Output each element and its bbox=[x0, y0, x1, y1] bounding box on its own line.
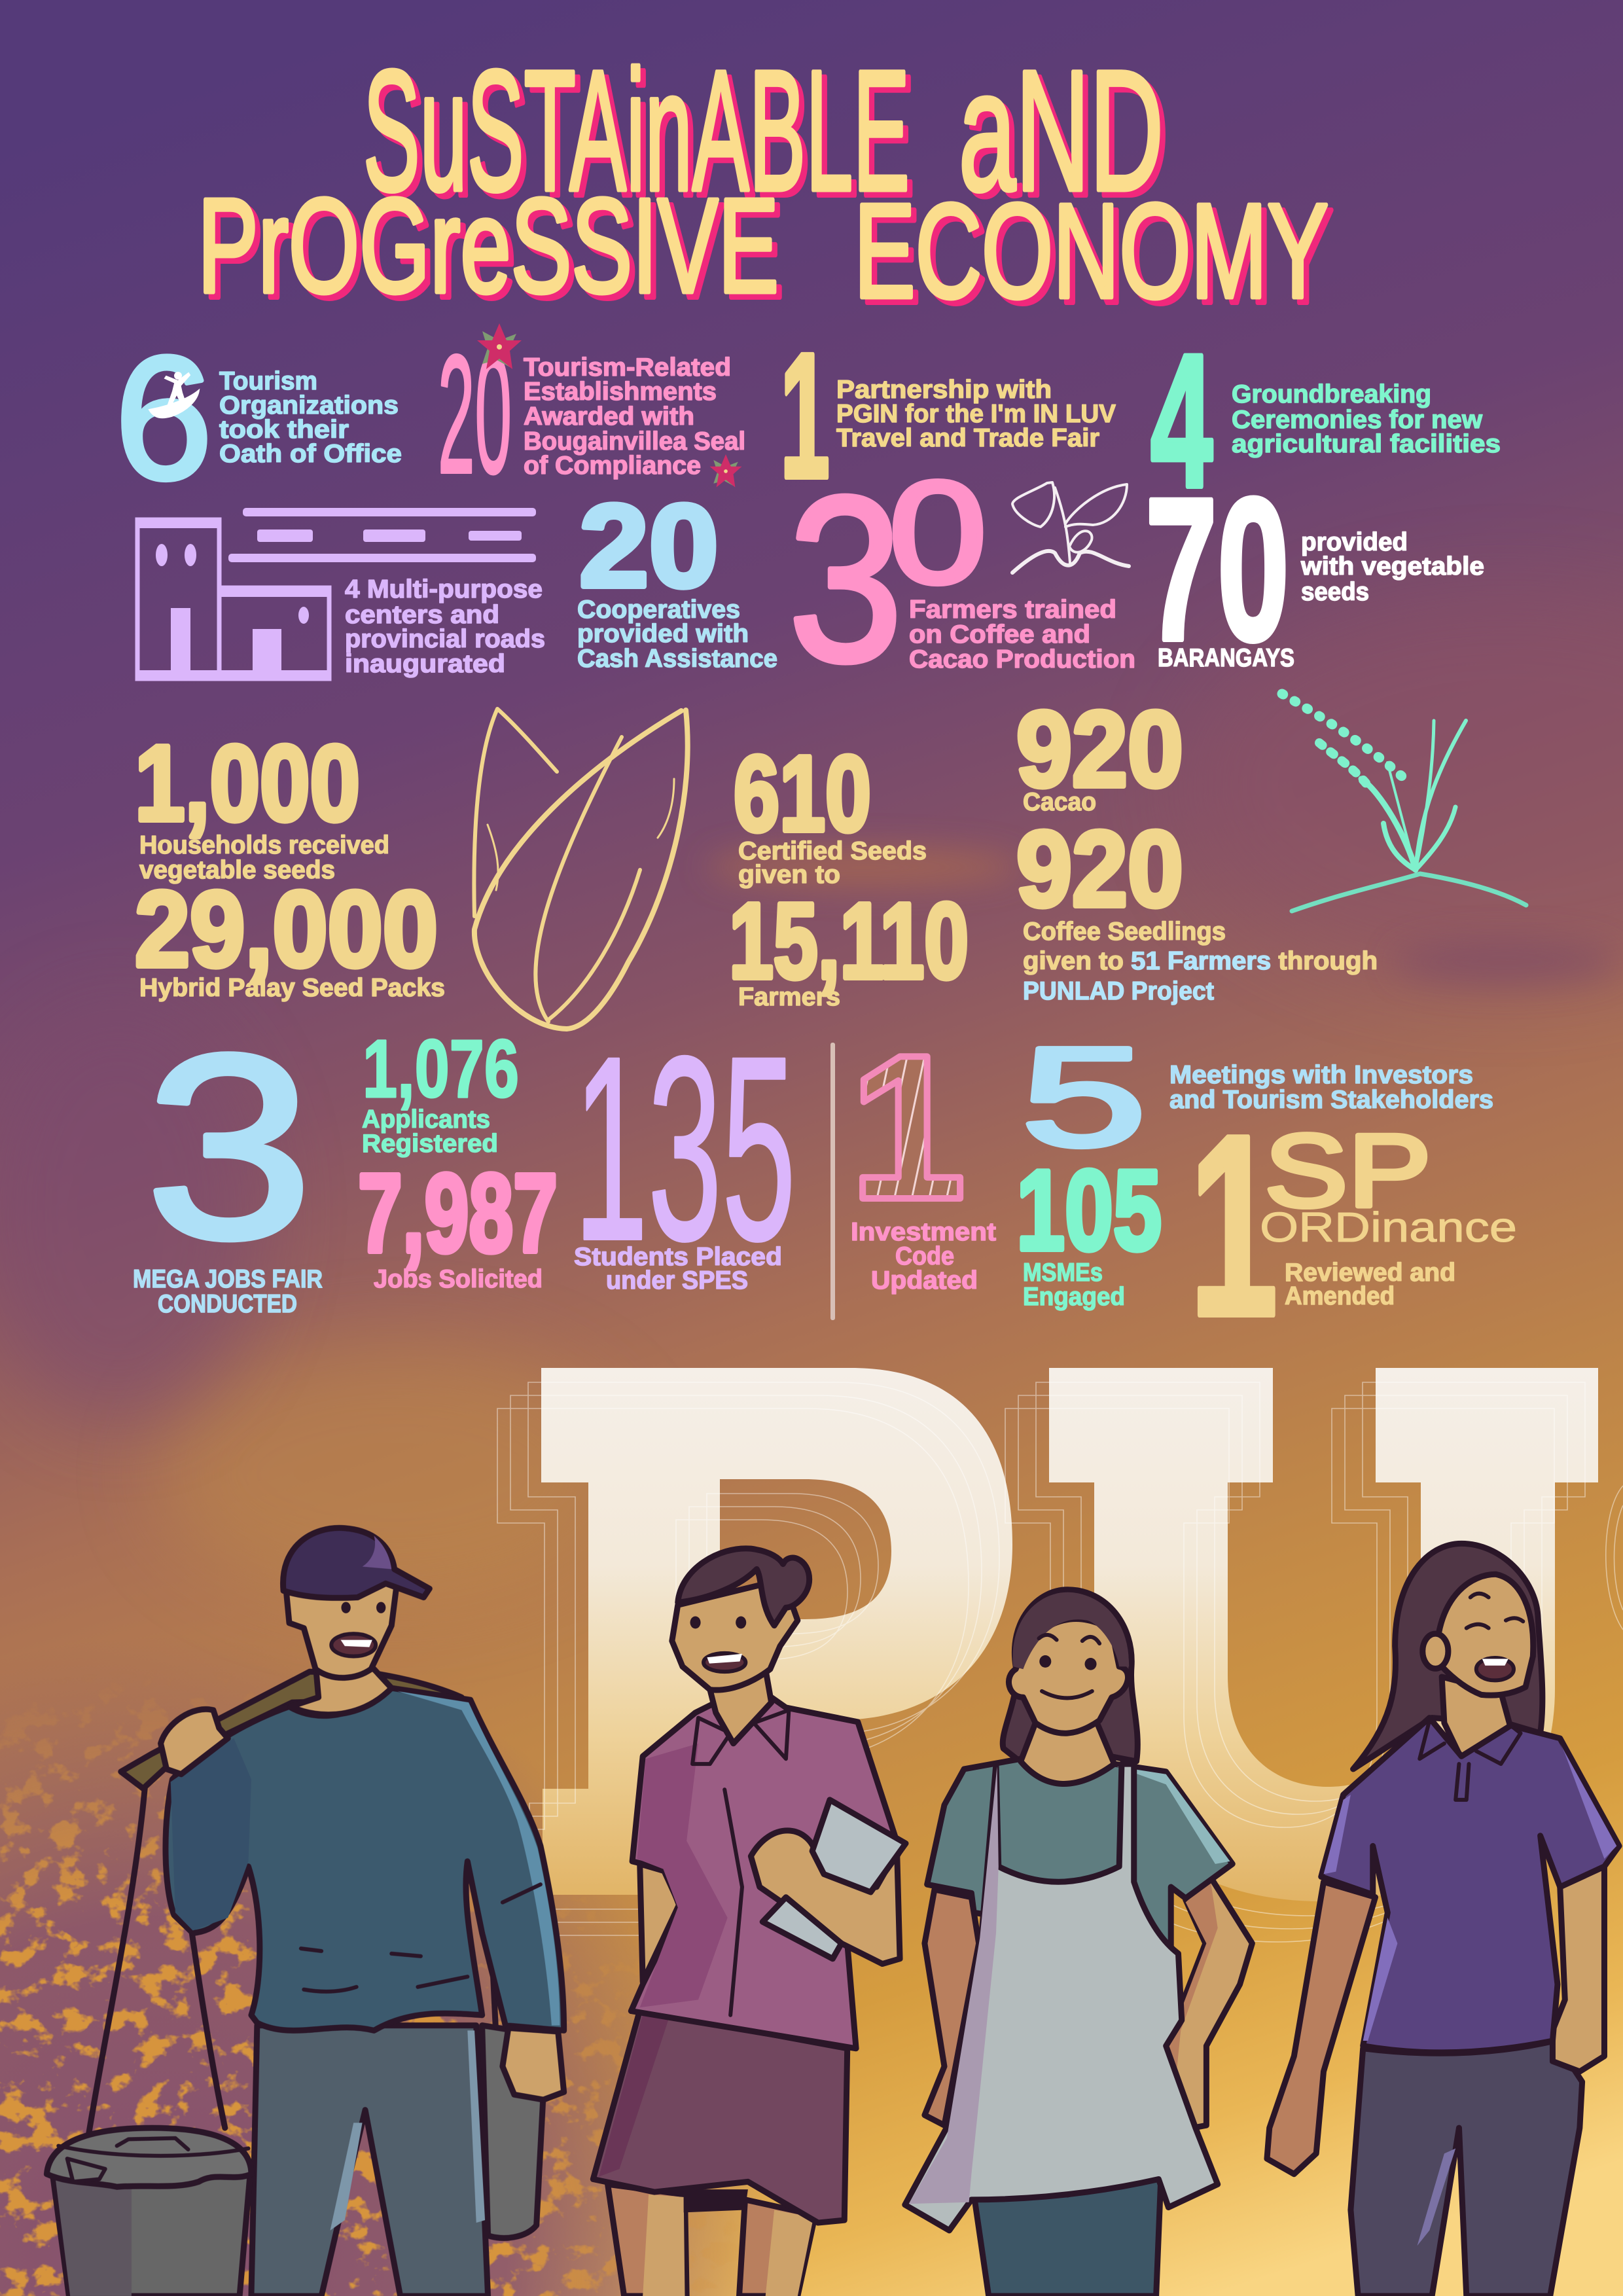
back bucket bbox=[482, 2026, 546, 2238]
eyes and mouth bbox=[690, 1617, 701, 1628]
stat: 20 tourism establishments: 20 bbox=[438, 319, 512, 509]
label: Tourism bbox=[219, 367, 317, 395]
label: of Compliance bbox=[524, 452, 701, 480]
label: MEGA JOBS FAIR bbox=[133, 1265, 323, 1293]
number 920: 920 bbox=[1016, 809, 1183, 929]
eyes and mouth bbox=[1467, 1594, 1523, 1628]
title: PrOGreSSIVE bbox=[198, 171, 779, 321]
label: Establishments bbox=[524, 378, 717, 406]
label: PUNLAD Project bbox=[1023, 977, 1214, 1005]
stat: 20 cooperatives bbox=[577, 480, 777, 673]
rope bbox=[88, 1787, 495, 2141]
stat: 1,000 households bbox=[135, 723, 389, 884]
number 29,000: 29,000 bbox=[135, 869, 438, 989]
head bbox=[287, 1579, 397, 1677]
stat: 20 tourism establishments bbox=[438, 319, 745, 509]
label: given to bbox=[738, 861, 840, 889]
stat: 1 investment code bbox=[849, 1012, 996, 1295]
icon: bougainvillea flower bottom bbox=[710, 454, 741, 487]
label bbox=[1023, 918, 1378, 1005]
label: Cacao Production bbox=[909, 645, 1135, 673]
label bbox=[133, 1265, 323, 1318]
stat: 1 SP ordinance bbox=[1189, 1081, 1517, 1370]
label: took their bbox=[219, 416, 349, 444]
sweater bbox=[166, 1688, 564, 2030]
label: agricultural facilities bbox=[1232, 430, 1501, 458]
label bbox=[362, 1105, 498, 1158]
pants bbox=[1351, 2041, 1582, 2296]
pants bbox=[251, 2026, 488, 2296]
label: Coffee Seedlings bbox=[1023, 918, 1226, 946]
stat: 7,987 jobs bbox=[358, 1151, 558, 1293]
label: provided with bbox=[577, 620, 749, 648]
left arm bbox=[640, 1864, 679, 1982]
giant background letters PU bbox=[497, 1368, 1623, 1942]
number 610: 610 bbox=[734, 734, 871, 853]
label: and Tourism Stakeholders bbox=[1169, 1086, 1493, 1114]
label: Awarded with bbox=[524, 403, 694, 431]
label bbox=[851, 1218, 996, 1295]
label: Amended bbox=[1285, 1282, 1395, 1310]
label: Cacao bbox=[1023, 788, 1096, 816]
label bbox=[1232, 380, 1501, 458]
right arm bbox=[1134, 1876, 1252, 2133]
label: Engaged bbox=[1023, 1283, 1125, 1311]
stat: 105 MSMEs bbox=[1016, 1146, 1162, 1311]
face bbox=[1008, 1619, 1128, 1733]
illustration: woman with notebook bbox=[593, 1549, 906, 2296]
label bbox=[219, 367, 402, 468]
number 6: 6 bbox=[115, 319, 213, 516]
title: PrOGreSSIVE bbox=[203, 176, 784, 326]
label: Groundbreaking bbox=[1232, 380, 1431, 408]
label: given to 51 Farmers through bbox=[1023, 947, 1378, 975]
label bbox=[524, 353, 745, 480]
label bbox=[1285, 1259, 1455, 1310]
illustration: woman in purple shirt bbox=[1267, 1543, 1619, 2296]
icon: rice plant bbox=[1282, 694, 1526, 911]
label: 4 Multi-purpose bbox=[345, 575, 543, 603]
label: under SPES bbox=[606, 1266, 748, 1295]
label: seeds bbox=[1301, 578, 1369, 606]
ordinance: ORDinance bbox=[1260, 1204, 1517, 1251]
right arm bbox=[1552, 1867, 1604, 2072]
label: Applicants bbox=[362, 1105, 490, 1134]
stat: 6 tourism organizations bbox=[115, 319, 402, 516]
arm fold line bbox=[301, 1884, 541, 1992]
stat: 135 students bbox=[574, 1002, 796, 1295]
label bbox=[1023, 1259, 1125, 1311]
left arm bbox=[925, 1890, 979, 2125]
title: aND bbox=[964, 40, 1169, 232]
stat: 920 cacao bbox=[1016, 689, 1183, 816]
stat: 1,076 applicants bbox=[362, 1024, 519, 1158]
shirt bbox=[631, 1697, 900, 2049]
label: Meetings with Investors bbox=[1169, 1061, 1473, 1089]
notebook bbox=[812, 1800, 906, 1892]
neck bbox=[291, 1664, 391, 1715]
pole bbox=[121, 1672, 461, 1789]
number 135: 135 bbox=[574, 1002, 796, 1295]
label: Updated bbox=[871, 1266, 978, 1295]
pants bbox=[974, 2174, 1161, 2296]
label bbox=[1158, 528, 1484, 672]
label bbox=[577, 596, 777, 673]
illustration: woman with apron bbox=[905, 1590, 1252, 2296]
title bbox=[198, 35, 1334, 331]
hair bbox=[1353, 1543, 1543, 1769]
number 920: 920 bbox=[1016, 689, 1183, 809]
label: Certified Seeds bbox=[738, 837, 927, 865]
number 1: 1 bbox=[780, 316, 830, 515]
number 1,076: 1,076 bbox=[363, 1024, 519, 1115]
stat: 610 certified seeds bbox=[734, 734, 927, 889]
label: Students Placed bbox=[574, 1243, 782, 1271]
eyes and smile bbox=[1039, 1655, 1051, 1668]
number 1: 1 bbox=[1189, 1081, 1278, 1370]
number 70: 70 bbox=[1145, 456, 1289, 683]
stat: 1 partnership bbox=[780, 316, 1116, 515]
label: Oath of Office bbox=[219, 440, 402, 468]
number 1,000: 1,000 bbox=[135, 723, 360, 843]
label: Farmers trained bbox=[909, 596, 1116, 624]
right forearm bbox=[751, 1831, 900, 1964]
label bbox=[909, 596, 1135, 673]
face bbox=[1437, 1574, 1533, 1695]
label: Households received bbox=[139, 831, 389, 859]
label: Organizations bbox=[219, 391, 399, 420]
label: CONDUCTED bbox=[158, 1290, 297, 1318]
number 5: 5 bbox=[1021, 1018, 1147, 1175]
icon: bougainvillea flower top bbox=[477, 323, 522, 369]
icon: sprout bbox=[1012, 482, 1129, 573]
icon: surfer bbox=[149, 372, 199, 418]
label: Bougainvillea Seal bbox=[524, 427, 745, 456]
back hair bbox=[1003, 1590, 1137, 1764]
stat: 70 barangays bbox=[1145, 456, 1484, 683]
label bbox=[574, 1243, 782, 1295]
number 30: 0 bbox=[889, 452, 987, 614]
shirt bbox=[927, 1759, 1232, 1946]
stat: multi-purpose centers and roads bbox=[137, 508, 545, 679]
number 1 hatched: 1 bbox=[849, 1012, 966, 1242]
holding hand bbox=[503, 2028, 564, 2100]
number 20: 20 bbox=[579, 480, 719, 612]
label: on Coffee and bbox=[909, 620, 1090, 649]
label: inaugurated bbox=[345, 650, 505, 678]
label: MSMEs bbox=[1023, 1259, 1103, 1287]
title: SuSTAinABLE bbox=[363, 35, 910, 226]
label: with vegetable bbox=[1300, 552, 1484, 581]
number 4: 4 bbox=[1150, 315, 1213, 527]
eyes and mouth bbox=[341, 1602, 351, 1613]
title: ECONOMY bbox=[854, 176, 1329, 326]
label bbox=[139, 831, 389, 884]
divider bbox=[830, 1043, 835, 1320]
hair bbox=[678, 1549, 810, 1626]
SP: SP bbox=[1264, 1113, 1431, 1229]
label: Code bbox=[895, 1242, 954, 1270]
label: Investment bbox=[851, 1218, 996, 1246]
neck bbox=[1442, 1677, 1510, 1759]
icon: seed bbox=[474, 709, 688, 1029]
label: provincial roads bbox=[345, 625, 545, 653]
title: SuSTAinABLE bbox=[368, 40, 915, 232]
cap bbox=[283, 1528, 429, 1598]
skirt bbox=[593, 2010, 847, 2223]
illustration: man with buckets bbox=[46, 1528, 564, 2296]
label: Hybrid Palay Seed Packs bbox=[139, 974, 445, 1002]
icon: buildings and road bbox=[137, 508, 536, 679]
left arm bbox=[1267, 1882, 1376, 2174]
stat: 30 farmers trained bbox=[788, 448, 1135, 711]
apron bbox=[905, 1764, 1218, 2231]
stat: 920 coffee seedlings bbox=[1016, 809, 1378, 1005]
front bucket bbox=[52, 2174, 250, 2296]
label: Tourism-Related bbox=[524, 353, 731, 382]
head bbox=[672, 1579, 798, 1690]
number 30: 3 bbox=[788, 448, 903, 711]
label bbox=[738, 837, 927, 889]
number 15,110: 15,110 bbox=[729, 881, 969, 1001]
label: Registered bbox=[362, 1130, 498, 1158]
number 105: 105 bbox=[1016, 1146, 1162, 1274]
legs bbox=[608, 2184, 815, 2296]
shirt bbox=[1321, 1718, 1619, 2053]
label bbox=[1169, 1061, 1493, 1114]
title: ECONOMY bbox=[859, 181, 1334, 331]
label: Reviewed and bbox=[1285, 1259, 1455, 1287]
label: provided bbox=[1301, 528, 1408, 556]
stat: 5 meetings bbox=[1021, 1018, 1493, 1175]
label: Partnership with bbox=[836, 376, 1052, 404]
number 7,987: 7,987 bbox=[358, 1151, 558, 1276]
label bbox=[345, 575, 545, 678]
label: PGIN for the I'm IN LUV bbox=[836, 400, 1116, 428]
collar bbox=[1419, 1721, 1521, 1800]
label: vegetable seeds bbox=[139, 856, 335, 884]
stat: 15,110 farmers bbox=[729, 881, 969, 1011]
label: BARANGAYS bbox=[1158, 644, 1294, 672]
neck bbox=[1021, 1723, 1115, 1784]
label: Cash Assistance bbox=[577, 645, 777, 673]
label: Travel and Trade Fair bbox=[836, 424, 1099, 452]
label: Farmers bbox=[738, 983, 840, 1011]
label: Jobs Solicited bbox=[374, 1265, 543, 1293]
neck bbox=[710, 1669, 772, 1744]
title: aND bbox=[959, 35, 1164, 226]
label: Cooperatives bbox=[577, 596, 740, 624]
stat: 4 groundbreaking bbox=[1150, 315, 1501, 527]
number 30 bbox=[788, 448, 987, 711]
number 3: 3 bbox=[145, 1000, 313, 1293]
label: Ceremonies for new bbox=[1232, 406, 1483, 434]
stat: 3 mega jobs fair bbox=[133, 1000, 323, 1318]
stat: 29,000 seed packs bbox=[135, 869, 445, 1002]
label: centers and bbox=[345, 601, 499, 629]
pole hand bbox=[161, 1710, 228, 1774]
label bbox=[836, 376, 1116, 452]
